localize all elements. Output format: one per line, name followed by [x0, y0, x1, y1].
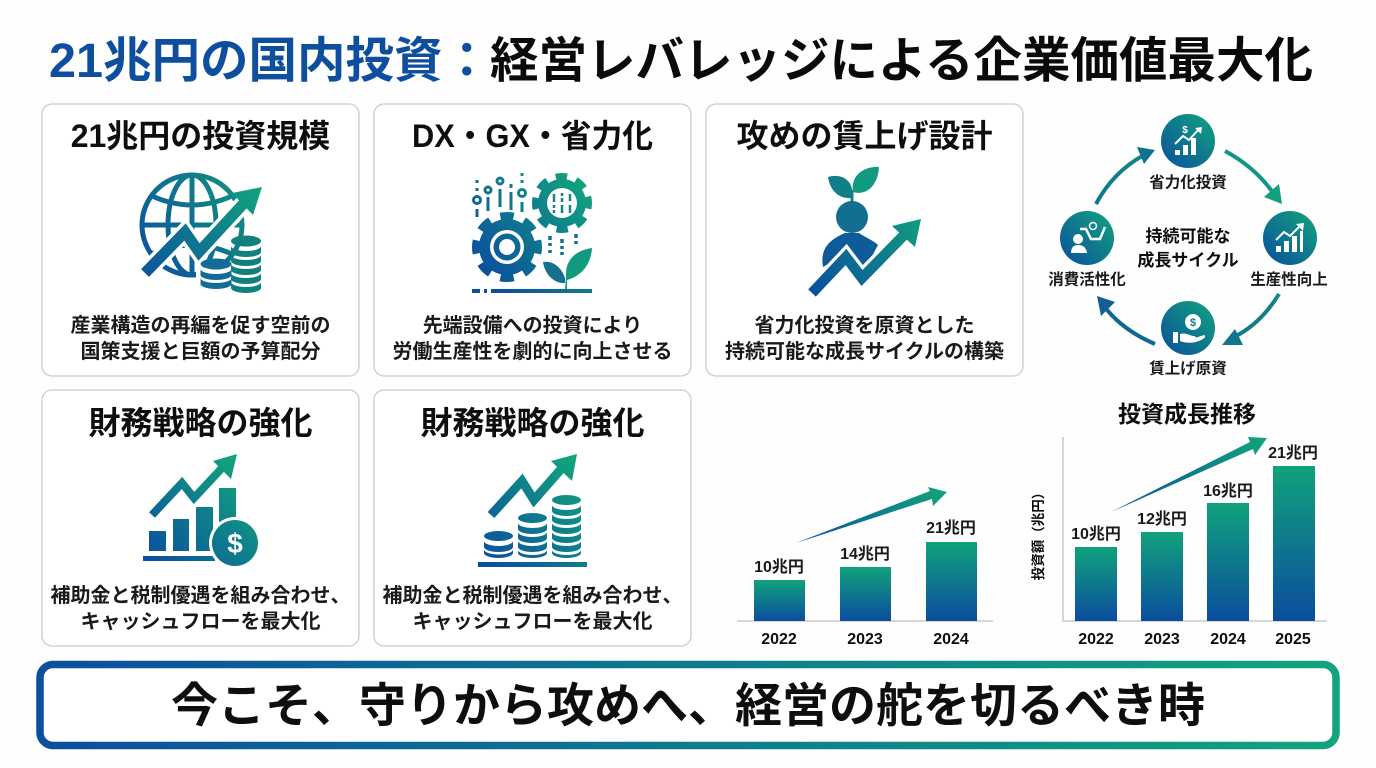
callout banner: 今こそ、守りから攻めへ、経営の舵を切るべき時	[171, 679, 1205, 732]
bar chart: 投資成長推移: 10兆円	[1071, 525, 1121, 543]
bar chart: 2022-2024: 14兆円	[840, 545, 890, 563]
node: 賃上げ原資: 賃上げ原資	[1149, 358, 1227, 378]
description: キャッシュフローを最大化	[80, 610, 320, 633]
bar chart: 投資成長推移: 2025	[1275, 631, 1311, 648]
heading: 財務戦略の強化	[420, 405, 645, 441]
heading: 21兆円の投資規模	[71, 118, 330, 154]
heading: 財務戦略の強化	[88, 405, 313, 441]
trend arrow	[796, 487, 947, 543]
panel: 攻めの賃上げ設計	[706, 104, 1023, 376]
icon: coin stacks and arrow	[478, 454, 587, 567]
node: 省力化投資	[1149, 114, 1227, 192]
bar chart: 2022-2024: 10兆円	[754, 558, 804, 576]
bar chart: 2022-2024: 21兆円	[926, 519, 976, 537]
icon: bars, arrow and dollar coin	[143, 454, 261, 569]
bar chart: 2022-2024	[737, 487, 993, 648]
cycle center label: 持続可能な	[1146, 226, 1230, 246]
description: 産業構造の再編を促す空前の	[70, 314, 330, 337]
node: 省力化投資: 省力化投資	[1149, 172, 1227, 192]
bar chart: 2022-2024: 2023	[847, 631, 883, 648]
icon: gears, data and plant	[472, 173, 592, 291]
node: 賃上げ原資	[1149, 301, 1227, 378]
description: 労働生産性を劇的に向上させる	[392, 340, 672, 363]
chart title: 投資成長推移	[1118, 401, 1256, 427]
description: 持続可能な成長サイクルの構築	[725, 339, 1004, 363]
panel: 21兆円の投資規模	[42, 104, 359, 376]
heading: DX・GX・省力化	[412, 118, 653, 154]
callout banner	[40, 664, 1336, 746]
node: 生産性向上: 生産性向上	[1250, 270, 1328, 288]
bar chart: 投資成長推移: 2022	[1078, 631, 1114, 648]
description: 補助金と税制優遇を組み合わせ、	[50, 584, 350, 607]
trend arrow	[1111, 437, 1267, 512]
description: 国策支援と巨額の予算配分	[80, 340, 320, 363]
bar chart: 投資成長推移	[1030, 401, 1327, 648]
node: 省力化投資: $	[1182, 125, 1188, 136]
node: 消費活性化	[1048, 211, 1126, 288]
panel: DX・GX・省力化	[374, 104, 691, 376]
description: 省力化投資を原資とした	[754, 314, 974, 337]
panel: 財務戦略の強化 (right)	[374, 390, 691, 646]
heading: 攻めの賃上げ設計	[736, 118, 993, 154]
node: 消費活性化: 消費活性化	[1048, 270, 1126, 288]
cycle center label: 成長サイクル	[1137, 250, 1239, 270]
node: 生産性向上	[1250, 211, 1328, 288]
title: 経営レバレッジによる企業価値最大化	[490, 34, 1313, 88]
description: 先端設備への投資により	[423, 314, 642, 337]
icon: globe, rising arrow and coins	[142, 175, 262, 300]
description: 補助金と税制優遇を組み合わせ、	[382, 584, 682, 607]
bar chart: 投資成長推移: 2023	[1144, 631, 1180, 648]
description: キャッシュフローを最大化	[412, 610, 652, 633]
cycle arrows	[1096, 147, 1282, 345]
bar chart: 投資成長推移: 2024	[1210, 631, 1246, 648]
bar chart: 投資成長推移: 12兆円	[1137, 510, 1187, 528]
title: 21兆円の国内投資：	[49, 34, 491, 88]
bar chart: 2022-2024: 2022	[761, 631, 797, 648]
bar chart: 投資成長推移: 16兆円	[1203, 482, 1253, 500]
node: 賃上げ原資: $	[1190, 317, 1196, 329]
icon: person with sprout and arrow	[812, 167, 921, 293]
bar chart: 投資成長推移: 21兆円	[1268, 444, 1318, 462]
icon: bars, arrow and dollar coin: $	[227, 528, 243, 559]
y-axis label: 投資額（兆円）	[1030, 486, 1046, 580]
panel: growth cycle diagram	[1048, 114, 1328, 378]
panel: 財務戦略の強化 (left)	[42, 390, 359, 646]
bar chart: 2022-2024: 2024	[933, 631, 969, 648]
